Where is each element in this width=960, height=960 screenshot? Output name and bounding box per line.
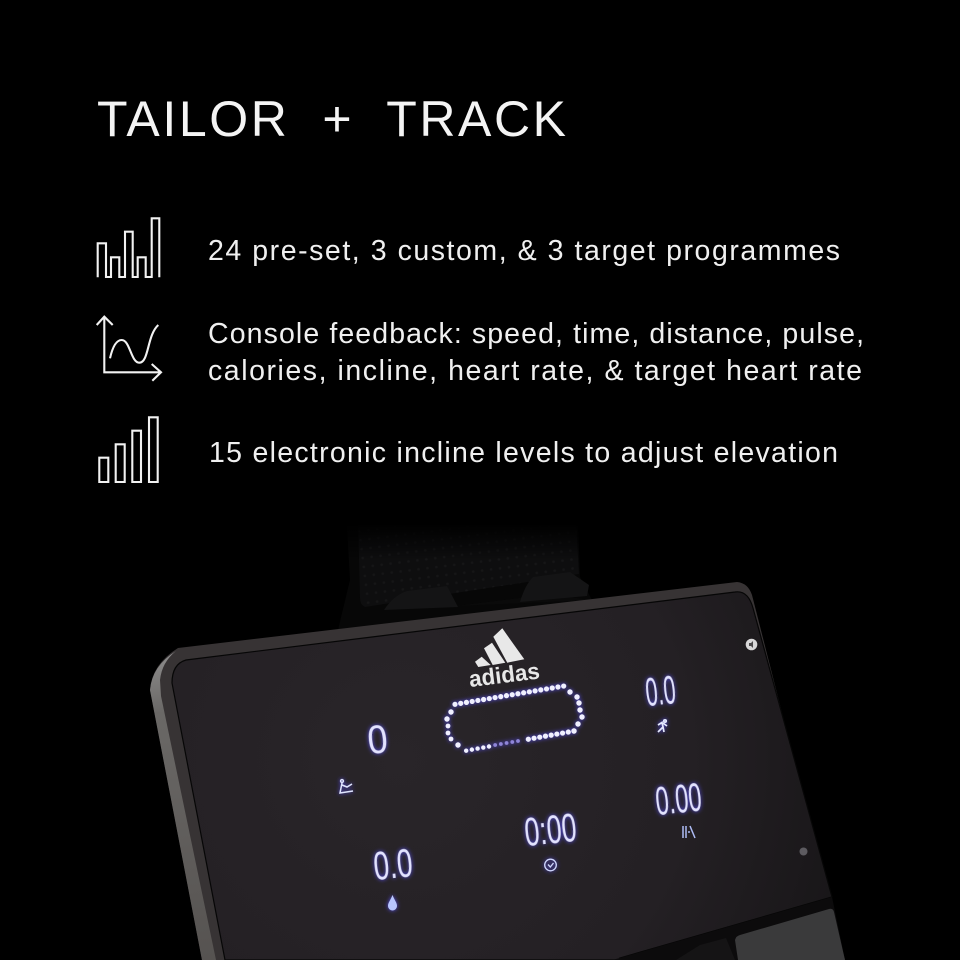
speed readout: 0.0	[643, 668, 678, 715]
adidas logo	[467, 628, 541, 692]
lower control strip	[612, 897, 845, 960]
icon: runner	[658, 720, 667, 732]
icon: sound button	[746, 639, 757, 650]
icon: feedback graph	[97, 317, 161, 381]
text: incline levels: 15 electronic incline levels to adjust elevation	[209, 437, 838, 469]
treadmill console	[150, 515, 845, 960]
icon: incline	[340, 780, 353, 793]
text: console feedback	[208, 318, 864, 387]
text: programmes: 24 pre-set, 3 custom, & 3 target programmes	[208, 235, 840, 267]
icon: incline bars	[99, 417, 158, 482]
incline readout: 0	[365, 717, 390, 763]
icon: calorie drop	[388, 895, 397, 910]
console glass	[172, 592, 832, 960]
title: TAILOR + TRACK	[97, 91, 566, 147]
console side facet	[150, 651, 216, 960]
icon: programme bars	[98, 218, 159, 277]
device holder	[338, 515, 592, 630]
text: console feedback: Console feedback: speed, time, distance, pulse,	[208, 318, 864, 350]
calories readout: 0.0	[371, 841, 415, 889]
icon: clock	[545, 859, 556, 871]
console bezel	[150, 582, 845, 960]
distance readout: 0.00	[653, 775, 704, 824]
adidas logo: adidas	[467, 658, 541, 692]
text: console feedback: calories, incline, heart rate, & target heart rate	[208, 355, 862, 387]
message dot ring	[444, 686, 585, 751]
time readout: 0:00	[522, 806, 579, 855]
feature list	[97, 218, 864, 482]
icon: distance road	[683, 826, 695, 838]
icon: bluetooth button	[800, 848, 808, 856]
